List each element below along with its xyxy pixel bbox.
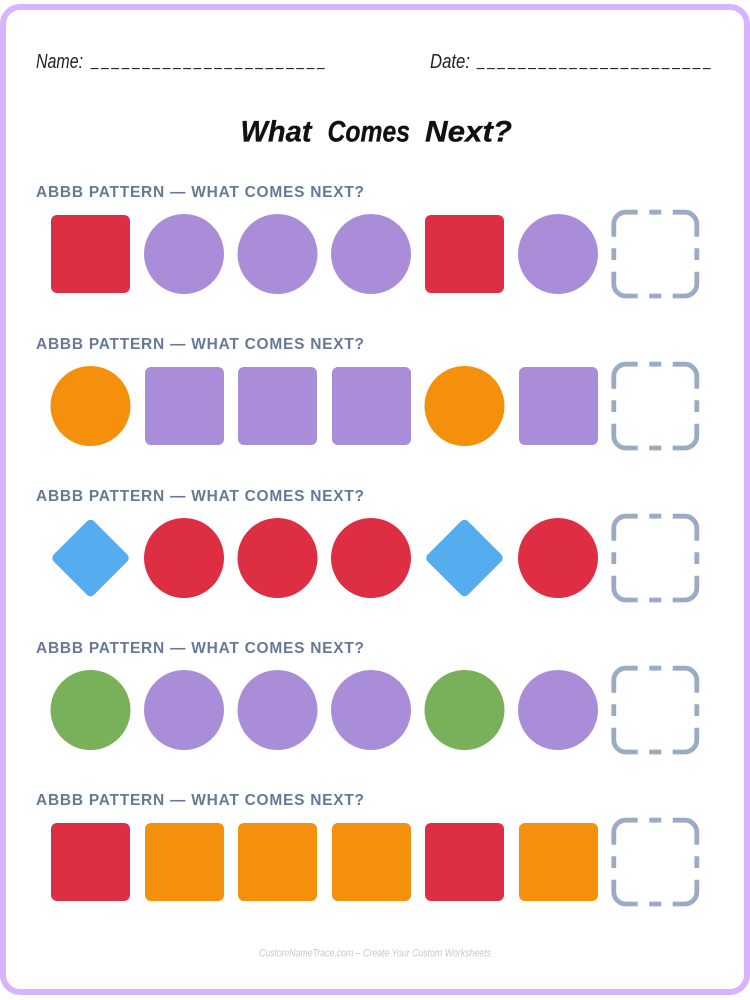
pattern row 3 [36, 488, 697, 600]
name field [36, 51, 327, 73]
row 3 heading: ABBB PATTERN — WHAT COMES NEXT? [36, 488, 364, 505]
pattern row 4 [36, 640, 697, 752]
row 2 shapes [50, 366, 598, 446]
row 4 answer box [614, 668, 697, 752]
pattern row 2 [36, 336, 697, 448]
pattern row 1 [36, 184, 697, 296]
row 5 shapes [51, 823, 598, 901]
row 3 shapes [50, 518, 598, 598]
date field: _______________________ [476, 54, 713, 69]
title: What [240, 116, 313, 148]
row 1 shapes [51, 214, 598, 294]
title: Comes [328, 116, 410, 148]
footer: CustomNameTrace.com – Create Your Custom Worksheets [259, 948, 491, 960]
pattern row 5 [36, 792, 697, 904]
row 5 heading: ABBB PATTERN — WHAT COMES NEXT? [36, 792, 364, 809]
name field: _______________________ [90, 54, 327, 69]
row 5 answer box [614, 820, 697, 904]
row 2 heading: ABBB PATTERN — WHAT COMES NEXT? [36, 336, 364, 353]
row 4 shapes [50, 670, 598, 750]
row 2 answer box [614, 364, 697, 448]
date field: Date: [430, 51, 470, 73]
row 1 heading: ABBB PATTERN — WHAT COMES NEXT? [36, 184, 364, 201]
title: Next? [425, 116, 512, 148]
row 4 heading: ABBB PATTERN — WHAT COMES NEXT? [36, 640, 364, 657]
date field [430, 51, 713, 73]
name field: Name: [36, 51, 83, 73]
row 3 answer box [614, 516, 697, 600]
row 1 answer box [614, 212, 697, 296]
